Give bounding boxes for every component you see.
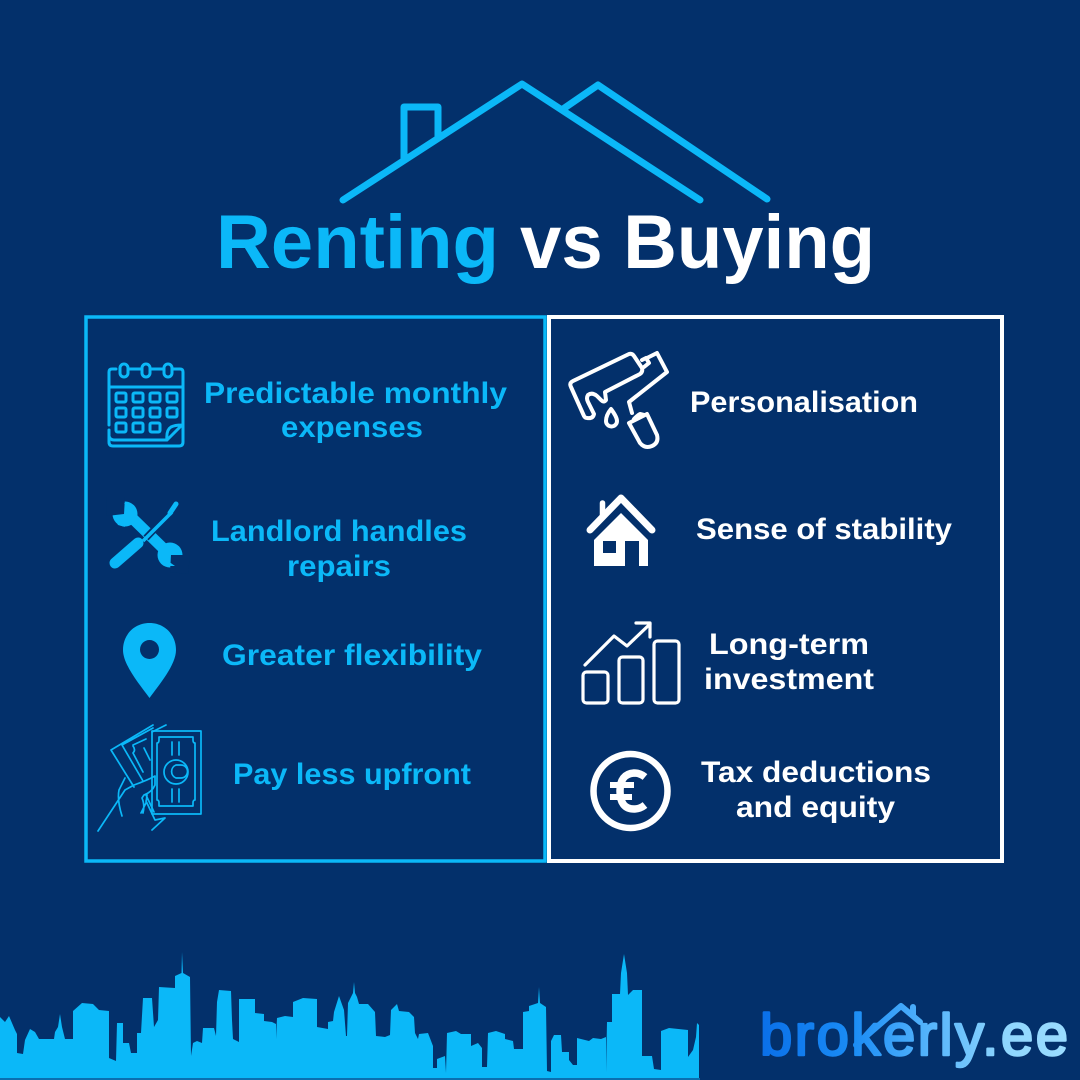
panel: buying [549, 317, 1002, 861]
text: tax deductions and equity [701, 756, 931, 824]
icon: house [590, 498, 652, 566]
icon: location pin [123, 623, 176, 698]
text: personalisation: Personalisation [690, 386, 918, 419]
panel: renting [86, 317, 545, 861]
title: vs Buying [520, 200, 875, 285]
text: greater flexibility: Greater flexibility [222, 639, 482, 672]
text: landlord handles repairs: Landlord handles [211, 515, 467, 548]
text: sense of stability: Sense of stability [696, 513, 952, 546]
text: long-term investment [704, 628, 874, 696]
text: tax deductions and equity: and equity [736, 791, 895, 824]
text: tax deductions and equity: Tax deductions [701, 756, 931, 789]
logo: brokerly.ee: brokerly.ee [760, 1003, 1068, 1068]
text: predictable monthly expenses: expenses [281, 411, 423, 444]
title [216, 200, 875, 285]
icon: calendar [109, 364, 183, 446]
text: landlord handles repairs: repairs [287, 550, 391, 583]
icon: euro coin [594, 754, 668, 828]
text: predictable monthly expenses [204, 377, 507, 444]
icon: paint roller [570, 353, 667, 447]
text: landlord handles repairs [211, 515, 467, 583]
text: predictable monthly expenses: Predictable monthly [204, 377, 507, 410]
skyline [0, 952, 700, 1080]
icon: wrench and screwdriver [106, 497, 190, 574]
text: pay less upfront: Pay less upfront [233, 758, 471, 791]
title: Renting [216, 200, 499, 285]
icon: hand holding money [98, 725, 201, 831]
text: long-term investment: Long-term [709, 628, 869, 661]
icon: growth chart [583, 623, 679, 703]
icon: house roof [343, 84, 767, 200]
text: long-term investment: investment [704, 663, 874, 696]
